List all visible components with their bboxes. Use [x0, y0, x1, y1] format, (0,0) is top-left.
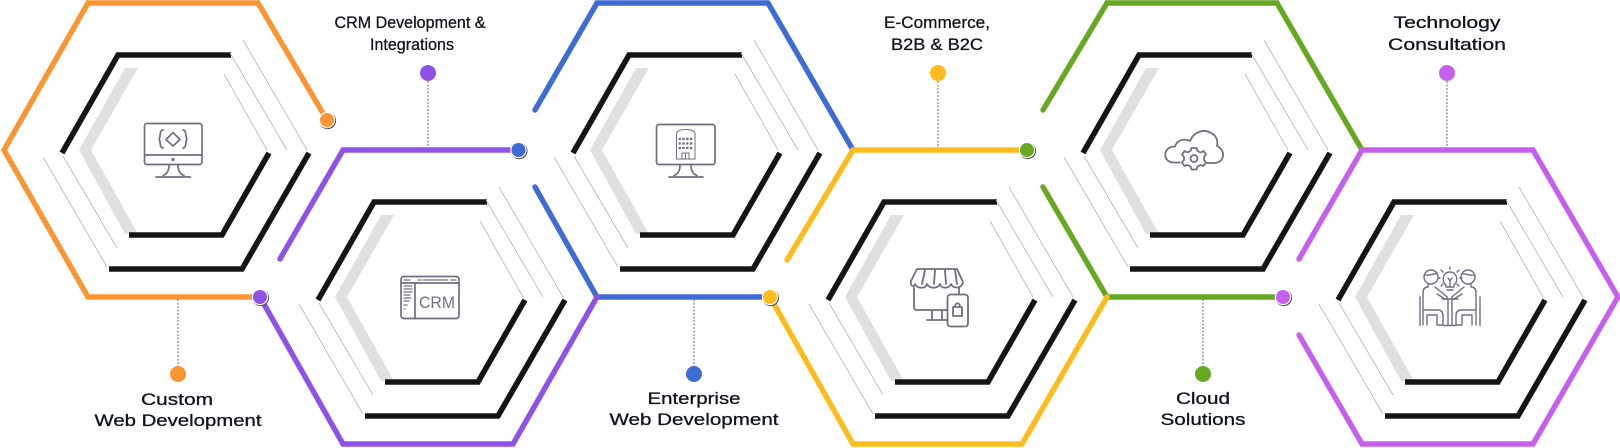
label text — [1388, 13, 1506, 54]
inner hexagon frames — [1319, 187, 1585, 416]
connector dot: green — [1019, 142, 1036, 159]
label: custom web development — [94, 299, 262, 430]
panel: technology consultation hexagon — [1299, 150, 1618, 444]
label: technology consultation — [1388, 13, 1506, 148]
panel: cloud solutions hexagon — [1043, 3, 1362, 297]
panel: enterprise web development hexagon — [535, 3, 853, 297]
label text: CRM Development & — [334, 13, 486, 32]
label: enterprise web development — [610, 299, 779, 429]
dashed leader and dot — [1439, 65, 1455, 148]
inner hexagon frames — [299, 187, 565, 416]
dashed leader and dot — [1195, 299, 1211, 382]
label text: B2B & B2C — [891, 35, 983, 54]
connector dot: orange — [319, 112, 336, 129]
label text: Consultation — [1388, 35, 1506, 54]
dashed leader and dot — [170, 299, 186, 382]
icon: cloud with gear — [1165, 131, 1223, 170]
panel: custom web development hexagon — [4, 3, 327, 297]
panel: crm development hexagon — [260, 150, 597, 444]
inner hexagon frames — [43, 40, 309, 269]
connector dot: blue — [510, 142, 528, 159]
label: cloud solutions — [1160, 299, 1246, 429]
label text: Enterprise — [648, 389, 740, 408]
hexagon outline: yellow — [770, 150, 1107, 444]
inner hexagon frames — [554, 40, 820, 269]
icon: two people with bulb — [1420, 267, 1480, 326]
hexagon outline: orange — [4, 3, 327, 297]
hexagon outline: blue — [535, 3, 853, 297]
dashed leader and dot — [930, 65, 946, 148]
inner hexagon frames — [809, 187, 1075, 416]
icon: building on monitor — [656, 124, 715, 177]
connector dot: purple — [252, 289, 269, 306]
dashed leader and dot — [420, 65, 436, 148]
icon: crm window: CRM — [419, 293, 455, 312]
hexagon outline: purple — [260, 150, 597, 444]
hexagon outline: green — [1043, 3, 1362, 297]
label text — [884, 13, 990, 54]
label text: Custom — [141, 390, 213, 409]
label text — [1160, 389, 1246, 429]
label text: Web Development — [610, 410, 779, 429]
dashed leader and dot — [686, 299, 702, 382]
label text — [94, 390, 262, 430]
label text: Web Development — [94, 411, 262, 430]
label text: E-Commerce, — [884, 13, 990, 32]
icon: code monitor — [144, 124, 202, 177]
label text — [610, 389, 779, 429]
connector dot: violet — [1275, 289, 1292, 306]
inner hexagon frames — [1064, 40, 1330, 269]
panel: e-commerce hexagon — [770, 150, 1107, 444]
connector dot: yellow — [762, 289, 779, 306]
label: e-commerce — [884, 13, 990, 148]
label text: Technology — [1394, 13, 1501, 32]
icon: shop with phone — [911, 269, 968, 326]
label text: Integrations — [370, 35, 454, 54]
label text: Solutions — [1160, 410, 1246, 429]
label text: Cloud — [1176, 389, 1230, 408]
hexagon outline: violet — [1299, 150, 1618, 444]
label text — [334, 13, 486, 54]
icon: crm window — [401, 276, 459, 318]
label: crm development — [334, 13, 486, 148]
